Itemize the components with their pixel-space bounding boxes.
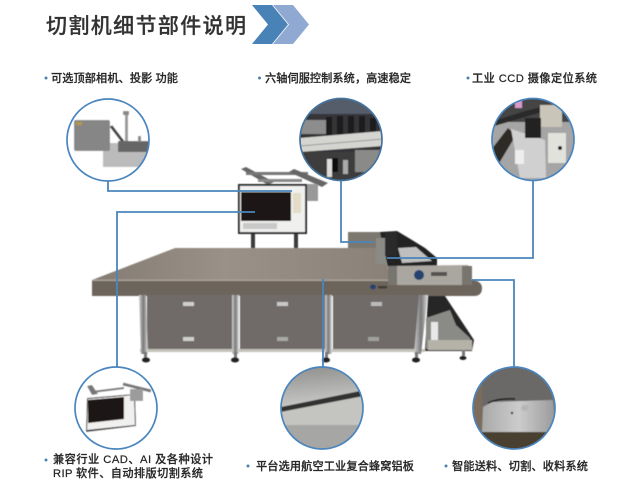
legs bbox=[139, 295, 466, 362]
label: platform: 平台选用航空工业复合蜂窝铝板 bbox=[256, 459, 414, 473]
label: software compatibility: RIP 软件、自动排版切割系统 bbox=[53, 466, 203, 480]
title: 切割机细节部件说明 bbox=[46, 15, 246, 38]
panel: CCD positioning detail bbox=[491, 98, 575, 182]
panel: software detail bbox=[74, 366, 158, 450]
band logo bbox=[370, 284, 387, 290]
gantry beam with logo bbox=[388, 265, 472, 285]
panel: honeycomb aluminium detail bbox=[280, 366, 364, 450]
monitor bbox=[238, 184, 307, 234]
label: top camera: 可选顶部相机、投影 功能 bbox=[51, 71, 178, 85]
panel: feed and collect system detail bbox=[472, 366, 556, 450]
cutting head bbox=[376, 232, 397, 264]
panel: six-axis servo detail bbox=[300, 98, 383, 182]
icon: double chevron arrow bbox=[252, 5, 309, 44]
table front band bbox=[92, 280, 482, 296]
label: software compatibility: 兼容行业 CAD、AI 及各种设计 bbox=[53, 452, 213, 466]
table top bbox=[92, 248, 390, 280]
label: CCD: 工业 CCD 摄像定位系统 bbox=[472, 71, 597, 85]
monitor stand and arm bbox=[241, 167, 328, 249]
conveyor and legs at right bbox=[425, 296, 474, 351]
label: software compatibility bbox=[44, 452, 213, 480]
gantry rear bbox=[348, 231, 437, 268]
machine illustration bbox=[92, 167, 482, 362]
cabinet panels bbox=[140, 295, 425, 352]
connector lines bbox=[108, 180, 533, 367]
label: servo: 六轴伺服控制系统，高速稳定 bbox=[265, 71, 411, 85]
label: feeding system: 智能送料、切割、收料系统 bbox=[452, 459, 588, 473]
panel: top camera detail bbox=[67, 99, 150, 181]
